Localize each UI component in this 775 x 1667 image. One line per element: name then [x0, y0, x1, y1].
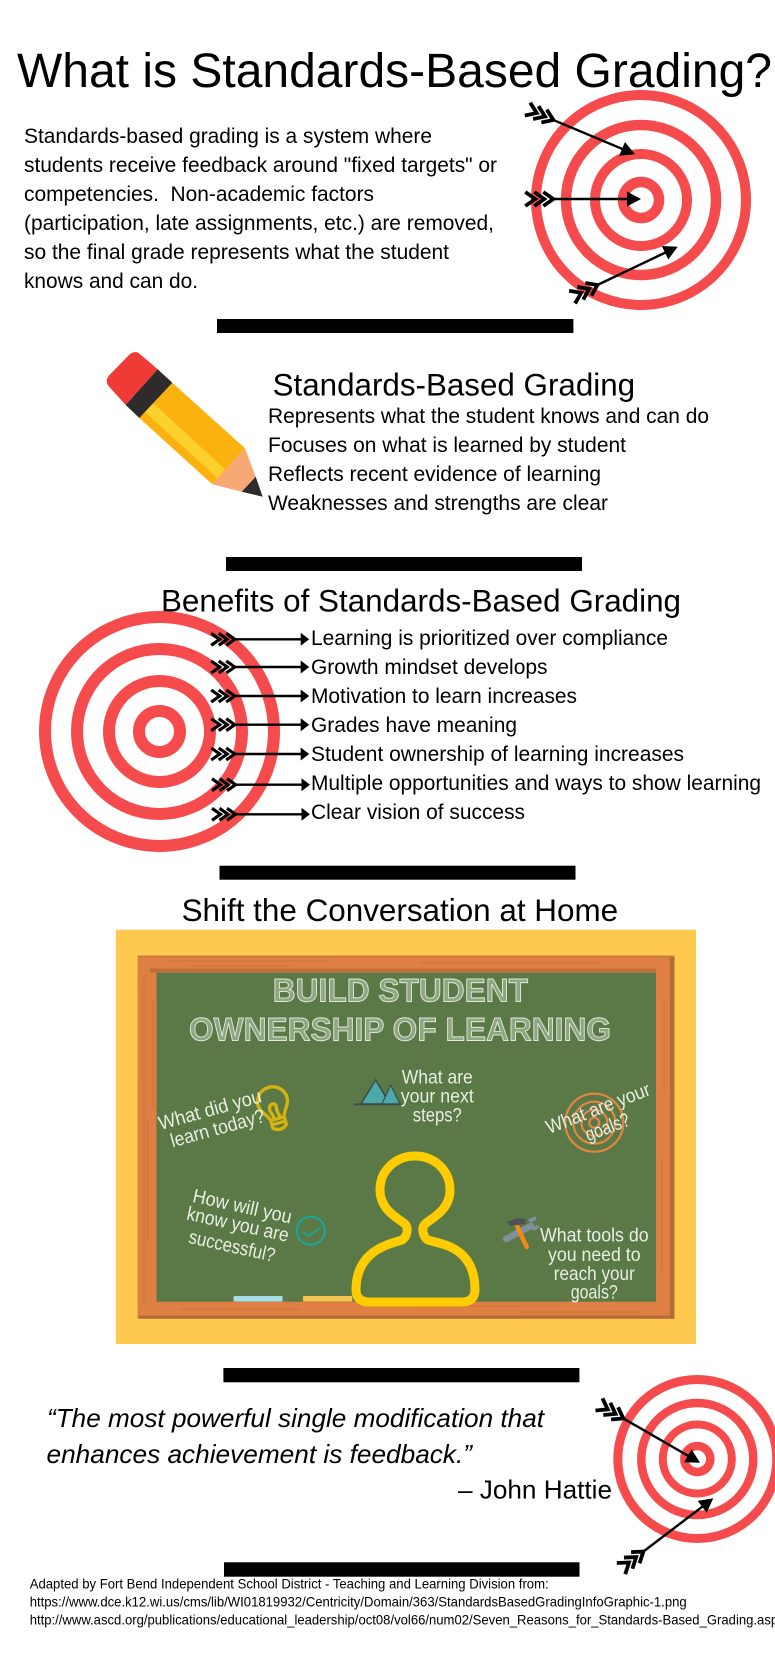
- question: what did you learn today: learn today?: [168, 1105, 268, 1152]
- question: what tools do you need: What tools do: [540, 1225, 649, 1247]
- question: how will you know you are successful: [180, 1185, 295, 1269]
- intro text block: knows and can do.: [24, 270, 198, 293]
- intro text block: (participation, late assignments, etc.) are removed,: [24, 212, 494, 235]
- quote: [46, 1403, 546, 1469]
- list: benefits: Multiple opportunities and ways to show learning: [311, 772, 761, 795]
- source credits: Adapted by Fort Bend Independent School District - Teaching and Learning Division from:: [30, 1576, 549, 1591]
- icon: student silhouette: [356, 1156, 475, 1302]
- chalk headline: BUILD STUDENT: [273, 973, 528, 1009]
- icon: target with two arrows: [595, 1380, 775, 1575]
- chalk pieces: [234, 1296, 352, 1302]
- question: what tools do you need: reach your: [554, 1263, 635, 1285]
- question: how will you know you are successful: How will you: [191, 1185, 294, 1228]
- list: benefits: Clear vision of success: [311, 801, 525, 824]
- chalk headline: [189, 973, 611, 1048]
- question: what did you learn today: [156, 1085, 269, 1154]
- source credits: https://www.dce.k12.wi.us/cms/lib/WI01819932/Centricity/Domain/363/StandardsBasedGradingInfoGraphic-1.png: [30, 1595, 687, 1610]
- heading: benefits: Benefits of Standards-Based Grading: [161, 584, 681, 619]
- icon: mountains: [354, 1080, 401, 1104]
- icon: light bulb: [254, 1083, 295, 1133]
- intro text block: Standards-based grading is a system where: [24, 125, 432, 148]
- list: benefits: [311, 627, 761, 824]
- question: how will you know you are successful: successful?: [187, 1226, 277, 1267]
- icon: hammer and wrench: [506, 1218, 538, 1247]
- heading: standards-based grading: Standards-Based Grading: [273, 367, 635, 402]
- icon: target with three arrows: [525, 95, 746, 305]
- question: next steps: steps?: [413, 1105, 462, 1127]
- question: what tools do you need: [540, 1225, 649, 1304]
- heading: shift the conversation: Shift the Conversation at Home: [182, 893, 618, 928]
- icon: check mark: [297, 1217, 325, 1245]
- list: benefits: Motivation to learn increases: [311, 685, 577, 708]
- list: benefits: Grades have meaning: [311, 714, 517, 737]
- intro text block: so the final grade represents what the student: [24, 241, 449, 264]
- wood frame: [138, 956, 675, 1319]
- question: what did you learn today: What did you: [156, 1085, 264, 1135]
- question: your goals: What are your: [543, 1079, 654, 1139]
- list: standards-based grading: Focuses on what is learned by student: [268, 434, 626, 457]
- question: what tools do you need: goals?: [571, 1282, 618, 1304]
- panel: chalkboard poster: [116, 930, 696, 1344]
- question: your goals: goals?: [582, 1109, 633, 1146]
- quote: “The most powerful single modification that: [47, 1403, 546, 1433]
- divider 1: [217, 319, 573, 333]
- question: next steps: your next: [401, 1086, 474, 1108]
- list: benefits: Growth mindset develops: [311, 656, 548, 679]
- list: standards-based grading: Represents what the student knows and can do: [268, 405, 709, 428]
- divider 3: [220, 866, 576, 880]
- divider 2: [226, 557, 582, 571]
- question: next steps: What are: [402, 1066, 473, 1088]
- icon: pencil: [107, 352, 263, 497]
- divider 4: [223, 1368, 579, 1382]
- list: standards-based grading: [268, 405, 709, 515]
- quote: enhances achievement is feedback.”: [46, 1439, 473, 1469]
- blackboard: [156, 973, 656, 1302]
- list: benefits: Student ownership of learning increases: [311, 743, 684, 766]
- chalk headline: OWNERSHIP OF LEARNING: [189, 1012, 611, 1048]
- source credits: [30, 1576, 775, 1627]
- list: standards-based grading: Weaknesses and strengths are clear: [268, 492, 608, 515]
- intro text block: [24, 125, 497, 293]
- question: your goals: [543, 1079, 661, 1158]
- question: how will you know you are successful: know you are: [185, 1203, 291, 1247]
- list: standards-based grading: Reflects recent evidence of learning: [268, 463, 601, 486]
- divider 5: [224, 1562, 580, 1577]
- intro text block: competencies. Non-academic factors: [24, 183, 374, 206]
- quote attribution: – John Hattie: [458, 1475, 612, 1505]
- list: benefits: Learning is prioritized over compliance: [311, 627, 668, 650]
- intro text block: students receive feedback around "fixed targets" or: [24, 154, 497, 177]
- icon: concentric goal target: [565, 1094, 623, 1152]
- title: What is Standards-Based Grading?: [17, 45, 772, 98]
- question: what tools do you need: you need to: [548, 1244, 641, 1266]
- icon: target with seven arrows: [45, 617, 310, 846]
- question: next steps: [401, 1066, 474, 1127]
